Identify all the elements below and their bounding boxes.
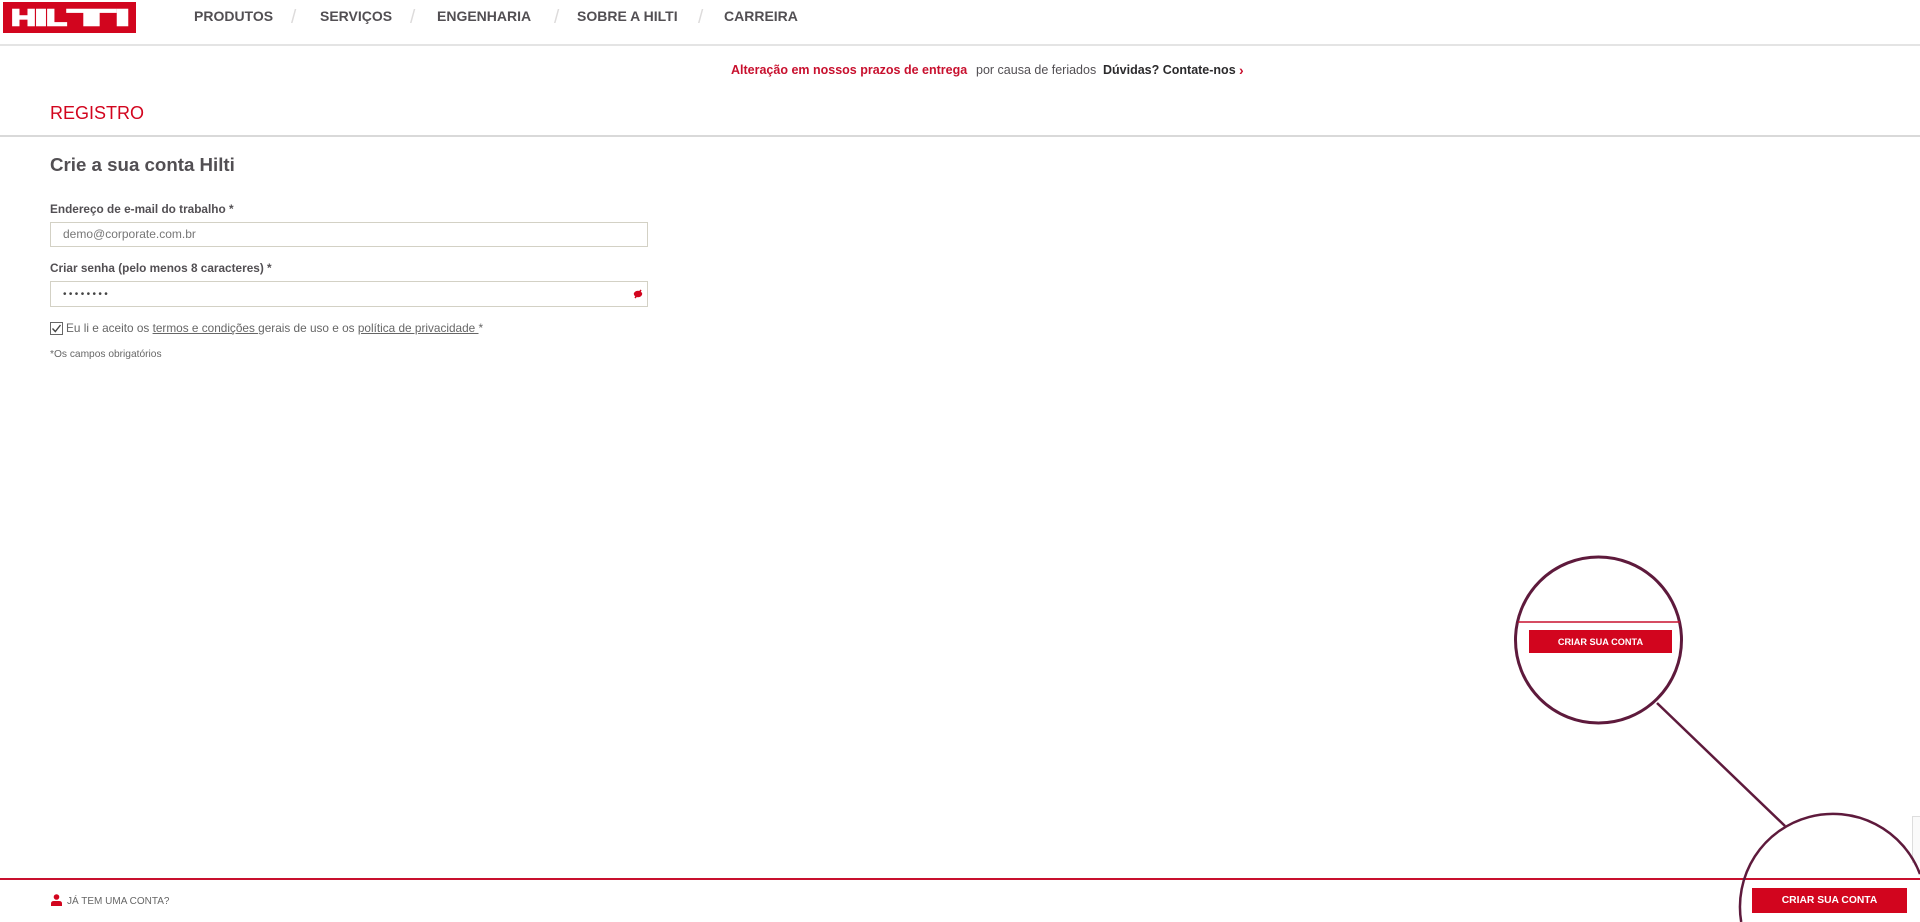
- logo: Hilti: L: [46, 4, 67, 30]
- notice banner: ›: [1239, 62, 1244, 78]
- terms text: Eu li e aceito os termos e condições gerais de uso e os política de privacidade *: [66, 321, 483, 335]
- notice banner: Dúvidas? Contate-nos: [1103, 63, 1236, 77]
- recaptcha badge edge: [1912, 816, 1920, 863]
- magnified button: [1529, 630, 1672, 653]
- icon: user: [51, 894, 62, 906]
- logo: Hilti: [3, 2, 136, 33]
- label: email: Endereço de e-mail do trabalho *: [50, 202, 234, 216]
- login prompt: JÁ TEM UMA CONTA?: [67, 896, 169, 907]
- logo: Hilti: I: [34, 4, 48, 30]
- notice banner: por causa de feriados: [976, 63, 1096, 77]
- navigation: serviços: SERVIÇOS: [320, 8, 392, 24]
- navigation: produtos: PRODUTOS: [194, 8, 273, 24]
- input: password: [50, 281, 648, 307]
- header bar: [0, 2, 1920, 46]
- connector line: [1657, 703, 1785, 826]
- magnifier circle: [1516, 557, 1682, 723]
- button: create account: CRIAR SUA CONTA: [1782, 895, 1877, 906]
- header bar: /: [554, 7, 559, 28]
- highlight circle: [1740, 814, 1920, 922]
- header bar: /: [410, 7, 415, 28]
- input: email: [50, 222, 648, 247]
- magnified button: CRIAR SUA CONTA: [1558, 637, 1643, 647]
- form heading: Crie a sua conta Hilti: [50, 154, 235, 175]
- notice banner: Alteração em nossos prazos de entrega: [731, 63, 967, 77]
- navigation: sobre a hilti: SOBRE A HILTI: [577, 8, 678, 24]
- logo: Hilti: T: [68, 4, 117, 30]
- checkbox: [50, 322, 63, 335]
- logo: Hilti: I: [115, 4, 130, 30]
- footer bar: [0, 878, 1920, 913]
- input: password: ••••••••: [63, 289, 110, 300]
- label: password: Criar senha (pelo menos 8 caracteres) *: [50, 261, 272, 275]
- page title: registro: REGISTRO: [50, 103, 144, 123]
- icon: show password: [634, 290, 642, 298]
- button: create account: [1752, 888, 1907, 913]
- input: email: demo@corporate.com.br: [63, 227, 196, 241]
- header bar: /: [698, 7, 703, 28]
- required note: *Os campos obrigatórios: [50, 349, 162, 360]
- logo: Hilti: H: [11, 4, 36, 30]
- navigation: carreira: CARREIRA: [724, 8, 798, 24]
- registration form: [50, 202, 648, 360]
- navigation: engenharia: ENGENHARIA: [437, 8, 531, 24]
- notice banner: [731, 62, 1244, 78]
- header bar: /: [291, 7, 296, 28]
